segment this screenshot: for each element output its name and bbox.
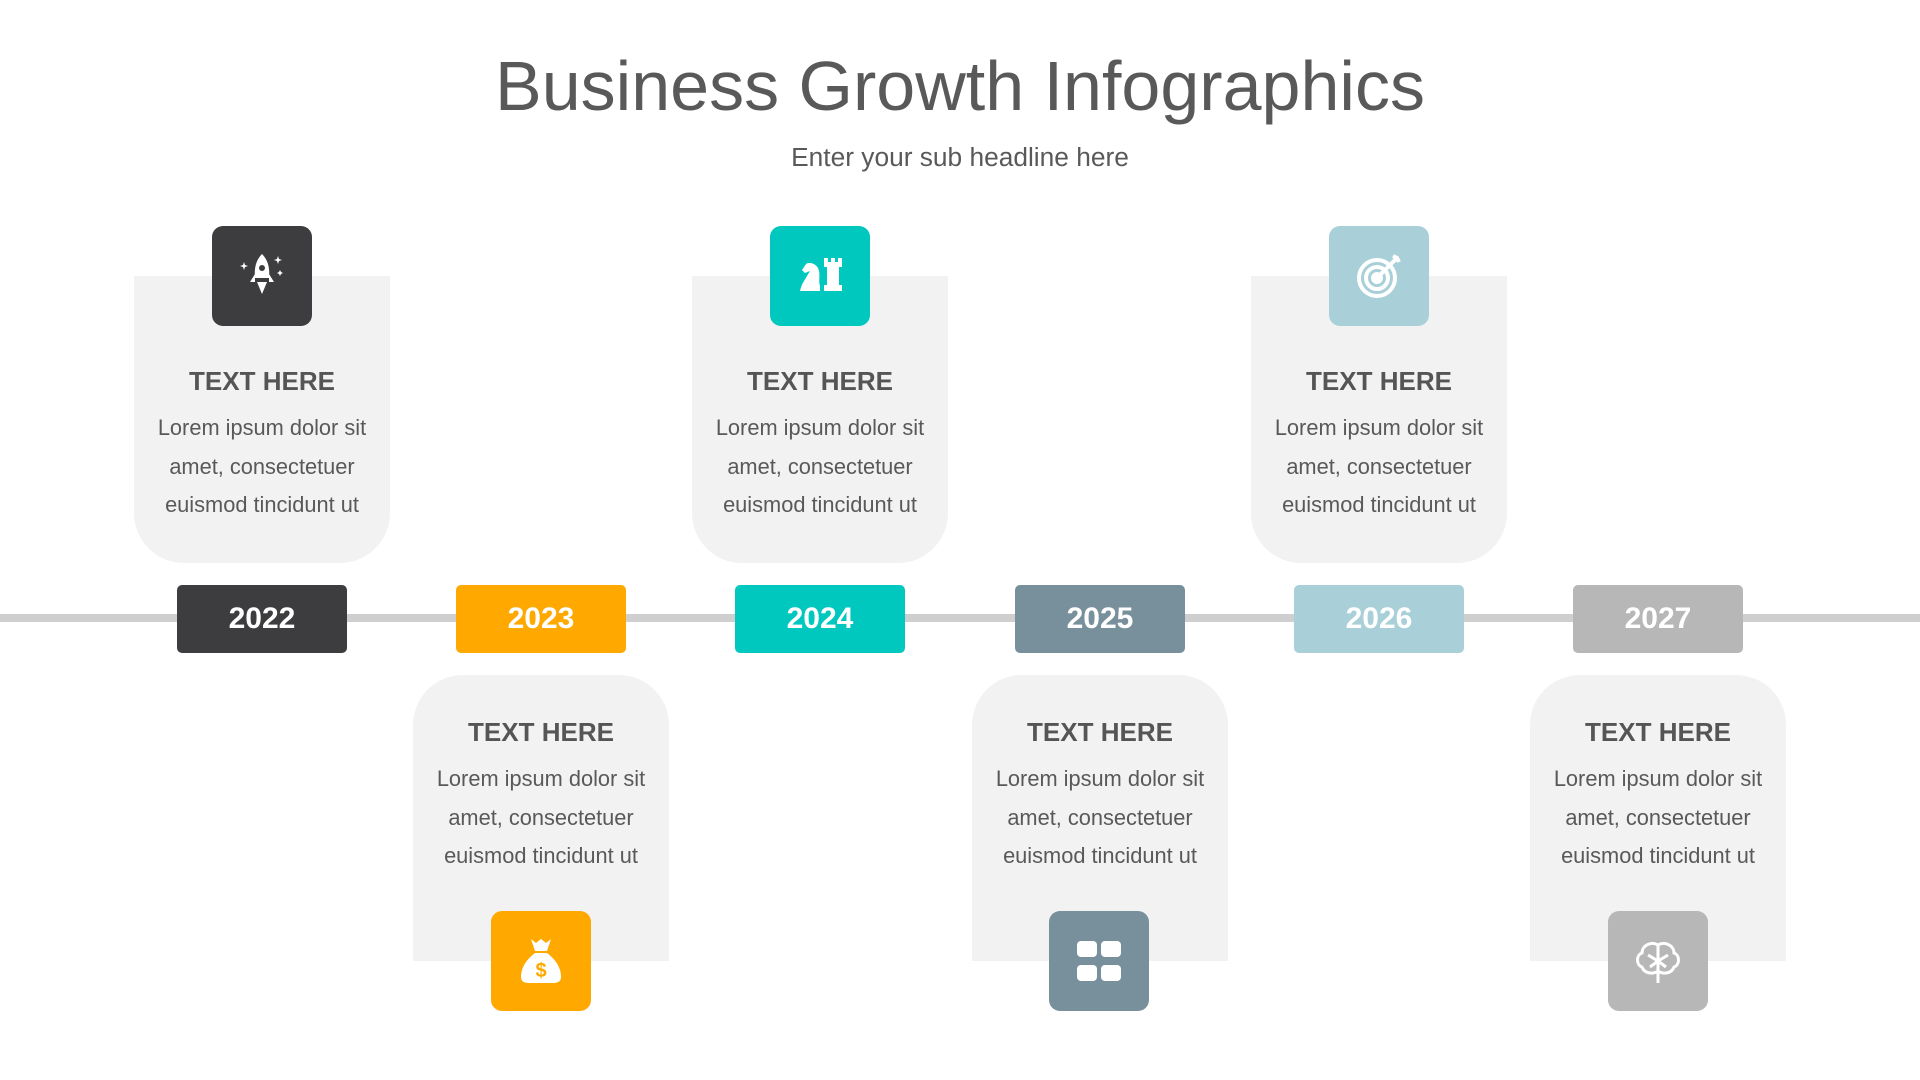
card: 2026 xyxy=(1251,276,1507,563)
year: 2024 xyxy=(735,585,905,653)
card: 2027: TEXT HERE xyxy=(1585,717,1731,747)
card: 2024: TEXT HERE xyxy=(747,366,893,396)
icon: rocket xyxy=(212,226,312,326)
year: 2023 xyxy=(456,585,626,653)
card: 2026: TEXT HERE xyxy=(1306,366,1452,396)
year: 2026: 2026 xyxy=(1346,602,1412,635)
card: 2023: Lorem ipsum dolor sit xyxy=(437,766,645,791)
card: 2026: euismod tincidunt ut xyxy=(1282,492,1476,517)
card: 2025: TEXT HERE xyxy=(1027,717,1173,747)
icon: chess xyxy=(770,226,870,326)
icon: brain xyxy=(1608,911,1708,1011)
year: 2025 xyxy=(1015,585,1185,653)
icon: money bag xyxy=(491,911,591,1011)
card: 2026: amet, consectetuer xyxy=(1286,454,1472,478)
title: Business Growth Infographics xyxy=(495,47,1425,125)
card: 2027: Lorem ipsum dolor sit xyxy=(1554,766,1762,791)
icon: target xyxy=(1329,226,1429,326)
card: 2025: euismod tincidunt ut xyxy=(1003,843,1197,868)
card: 2022 xyxy=(134,276,390,563)
card: 2027: euismod tincidunt ut xyxy=(1561,843,1755,868)
icon: money bag: $ xyxy=(535,960,547,982)
card: 2023: TEXT HERE xyxy=(468,717,614,747)
card: 2022: euismod tincidunt ut xyxy=(165,492,359,517)
year: 2022: 2022 xyxy=(229,602,295,635)
year: 2023: 2023 xyxy=(508,602,574,635)
card: 2023 xyxy=(413,675,669,961)
card: 2024 xyxy=(692,276,948,563)
card: 2027 xyxy=(1530,675,1786,961)
card: 2027: amet, consectetuer xyxy=(1565,804,1751,830)
card: 2024: euismod tincidunt ut xyxy=(723,492,917,517)
card: 2023: amet, consectetuer xyxy=(448,804,634,830)
year: 2026 xyxy=(1294,585,1464,653)
year: 2027: 2027 xyxy=(1625,602,1691,635)
timeline line xyxy=(0,614,1920,622)
year: 2024: 2024 xyxy=(787,602,853,635)
card: 2022: TEXT HERE xyxy=(189,366,335,396)
card: 2025: amet, consectetuer xyxy=(1007,804,1193,830)
card: 2024: amet, consectetuer xyxy=(727,454,913,478)
card: 2024: Lorem ipsum dolor sit xyxy=(716,415,924,440)
year: 2022 xyxy=(177,585,347,653)
icon: hands xyxy=(1049,911,1149,1011)
card: 2025 xyxy=(972,675,1228,961)
card: 2025: Lorem ipsum dolor sit xyxy=(996,766,1204,791)
year: 2027 xyxy=(1573,585,1743,653)
year: 2025: 2025 xyxy=(1067,602,1133,635)
card: 2026: Lorem ipsum dolor sit xyxy=(1275,415,1483,440)
card: 2022: Lorem ipsum dolor sit xyxy=(158,415,366,440)
card: 2023: euismod tincidunt ut xyxy=(444,843,638,868)
card: 2022: amet, consectetuer xyxy=(169,454,355,478)
subtitle: Enter your sub headline here xyxy=(791,142,1129,172)
